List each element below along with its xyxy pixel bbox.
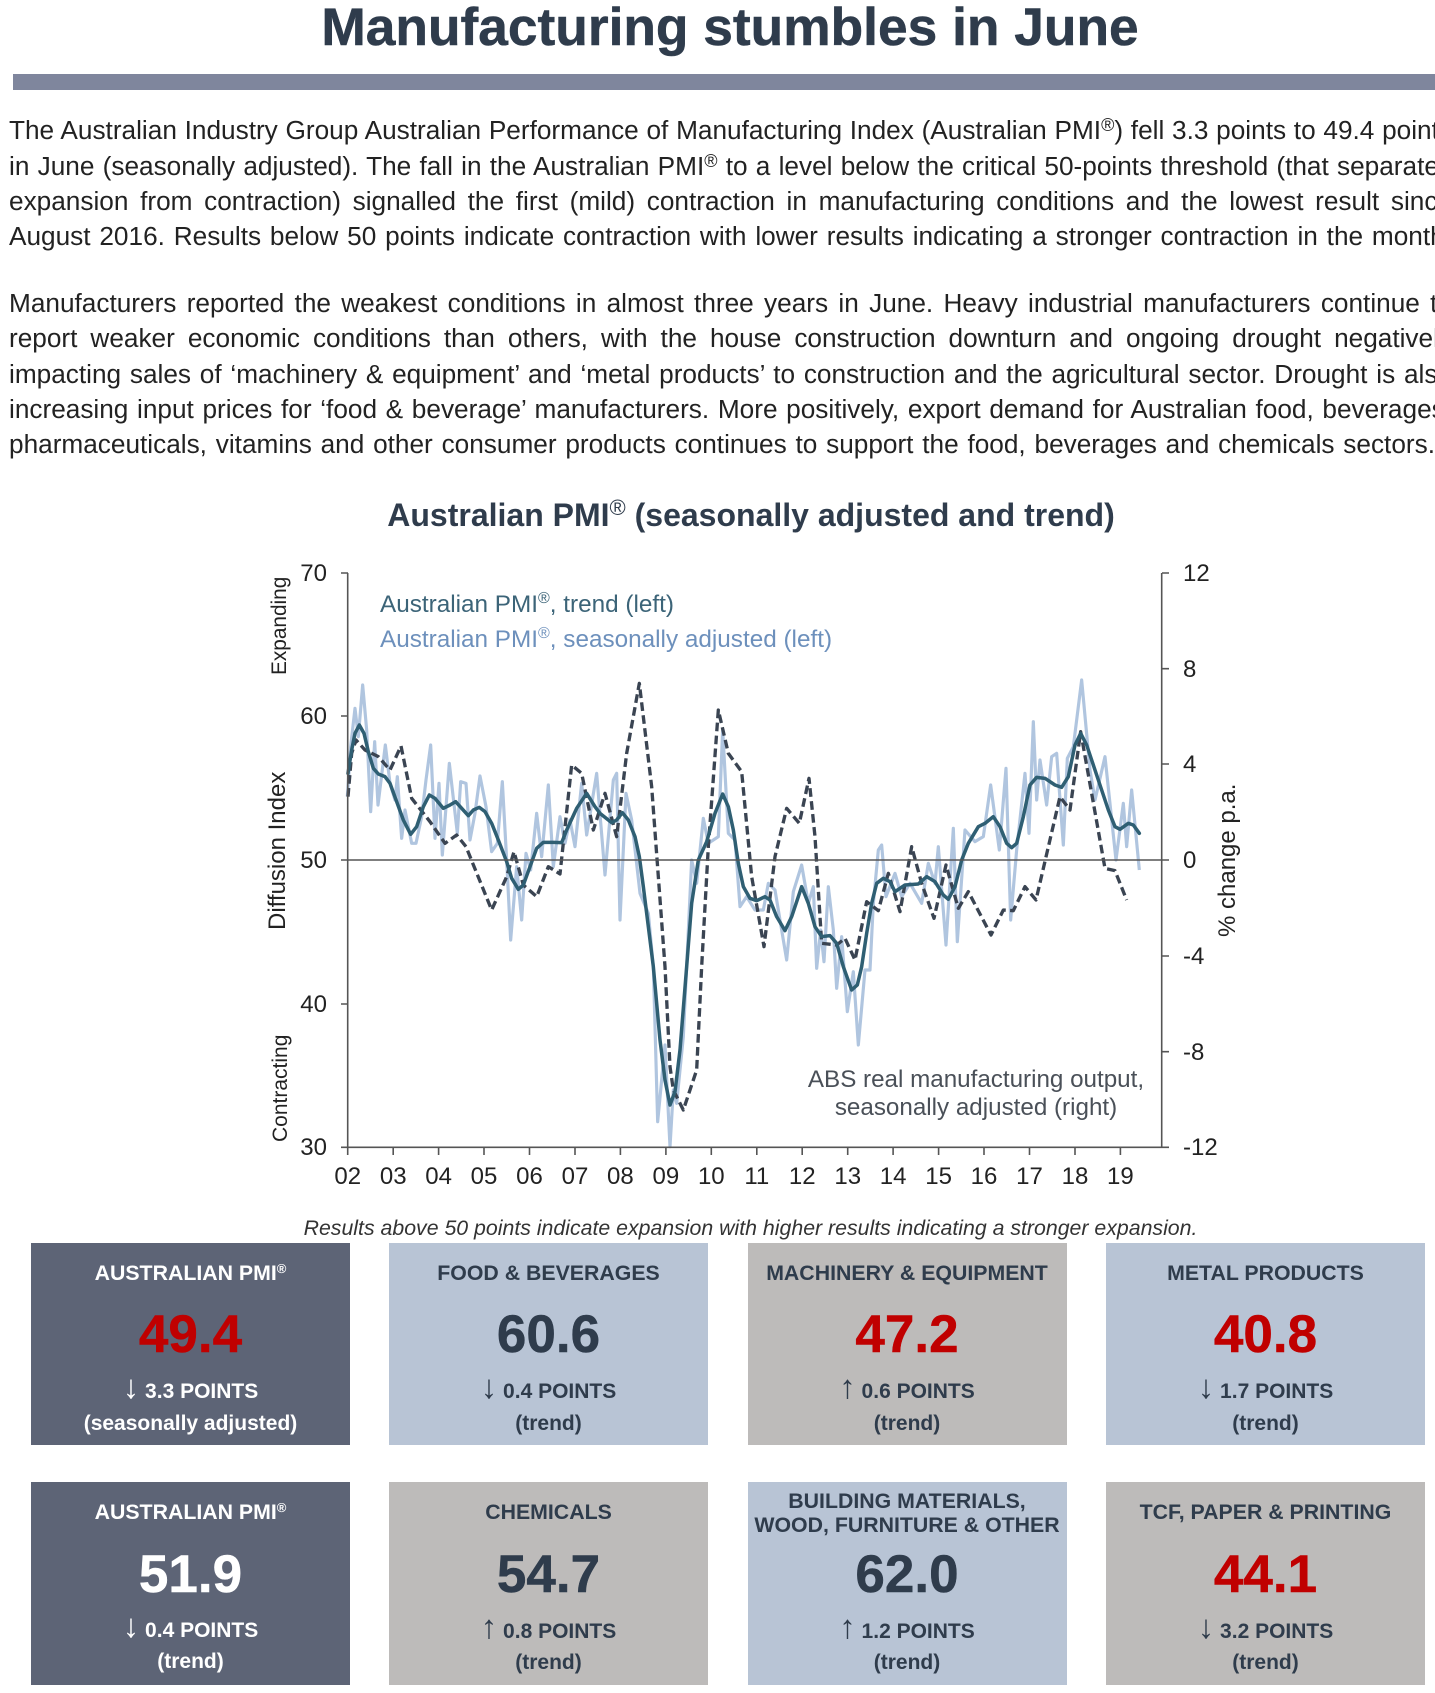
right axis labels: [1183, 560, 1218, 1161]
legend: trend: ®: [538, 590, 550, 607]
card: Machinery and equipment: (trend): [874, 1412, 940, 1435]
title divider bar: [13, 74, 1435, 90]
right axis labels: 12: [1183, 560, 1210, 587]
x axis year labels: 13: [834, 1163, 861, 1190]
card: Metal products: [1106, 1243, 1425, 1445]
card: Metal products: (trend): [1232, 1412, 1299, 1435]
card: Australian PMI seasonally adjusted: (seasonally adjusted): [84, 1412, 297, 1435]
legend: seasonally adjusted: Australian PMI: [380, 626, 538, 653]
card: Machinery and equipment: ↑ 0.6 POINTS: [839, 1368, 975, 1405]
x axis year labels: 18: [1062, 1163, 1088, 1190]
legend: ABS output: ABS real manufacturing output,: [808, 1066, 1144, 1093]
card: Chemicals: [389, 1482, 708, 1685]
x axis year labels: 12: [789, 1163, 816, 1190]
x axis year labels: 05: [471, 1163, 497, 1190]
axis title: Contracting: Contracting: [269, 1035, 292, 1142]
left axis labels: 60: [300, 703, 327, 730]
card: Food and beverages: [389, 1243, 708, 1445]
text block: intro paragraphs: increasing input prices for ‘food & beverage’ manufacturers. More positively, export demand for Australian food, beverages,: [9, 394, 1435, 424]
x axis year labels: 11: [744, 1163, 769, 1190]
card: Chemicals: CHEMICALS: [485, 1500, 612, 1524]
text block: intro paragraphs: August 2016. Results below 50 points indicate contraction with lower results indicating a stronger contraction in the month.: [9, 221, 1435, 251]
left axis labels: 70: [300, 560, 327, 587]
card: Chemicals: ↑ 0.8 POINTS: [481, 1608, 616, 1645]
right axis labels: 8: [1183, 656, 1196, 683]
legend: seasonally adjusted: , seasonally adjusted (left): [550, 626, 832, 653]
chart heading: ®: [610, 495, 626, 520]
card: TCF, paper and printing: 44.1: [1214, 1545, 1317, 1604]
caption: Results above 50 points indicate expansion with higher results indicating a stronger expansion.: [304, 1216, 1197, 1240]
card: TCF, paper and printing: (trend): [1232, 1651, 1299, 1674]
right axis labels: -8: [1183, 1039, 1204, 1066]
series: PMI seasonally adjusted: [347, 680, 1139, 1147]
x axis year labels: [334, 1163, 1134, 1190]
text block: intro paragraphs: The Australian Industry Group Australian Performance of Manufacturing Index (Australian PMI®) fell 3.3 points to 49.4 points: [9, 115, 1435, 145]
x axis year labels: 06: [516, 1163, 543, 1190]
right axis labels: -4: [1183, 943, 1204, 970]
card: Australian PMI seasonally adjusted: 49.4: [139, 1305, 243, 1364]
axis title: Diffusion Index: Diffusion Index: [264, 772, 291, 930]
card: Australian PMI trend: AUSTRALIAN PMI: [95, 1500, 277, 1524]
card: Chemicals: (trend): [515, 1651, 582, 1674]
text block: intro paragraphs: in June (seasonally adjusted). The fall in the Australian PMI® to a level below the critical 50-points threshold (that separates: [9, 151, 1435, 181]
right axis labels: -12: [1183, 1134, 1218, 1161]
x axis year labels: 07: [562, 1163, 588, 1190]
card: Building materials: WOOD, FURNITURE & OTHER: [754, 1513, 1060, 1537]
card: Building materials: BUILDING MATERIALS,: [788, 1489, 1026, 1513]
card: Food and beverages: 60.6: [497, 1305, 600, 1364]
right axis labels: 4: [1183, 751, 1196, 778]
card: Australian PMI seasonally adjusted: ↓ 3.3 POINTS: [123, 1368, 258, 1405]
x axis year labels: 14: [880, 1163, 906, 1190]
x axis year labels: 10: [698, 1163, 725, 1190]
x axis year labels: 16: [971, 1163, 997, 1190]
legend: seasonally adjusted: ®: [538, 625, 550, 642]
text block: intro paragraphs: Manufacturers reported the weakest conditions in almost three years in June. Heavy industrial manufacturers continue to: [9, 288, 1435, 318]
card: Australian PMI trend: [31, 1482, 350, 1685]
legend: ABS output second line: seasonally adjusted (right): [835, 1094, 1117, 1121]
card: Metal products: METAL PRODUCTS: [1167, 1261, 1364, 1285]
x axis year labels: 09: [653, 1163, 679, 1190]
chart heading: (seasonally adjusted and trend): [626, 497, 1115, 533]
x axis year labels: 17: [1016, 1163, 1043, 1190]
card: Building materials: 62.0: [855, 1545, 959, 1604]
card: Food and beverages: ↓ 0.4 POINTS: [481, 1368, 616, 1405]
x axis year labels: 04: [425, 1163, 452, 1190]
chart heading: Australian PMI: [387, 497, 610, 533]
x axis year labels: 02: [334, 1163, 361, 1190]
card: Building materials: [748, 1482, 1067, 1685]
series: PMI trend: [348, 725, 1139, 1105]
text block: intro paragraphs: [9, 115, 1435, 459]
card: Building materials: ↑ 1.2 POINTS: [839, 1608, 975, 1645]
axis title: Expanding: Expanding: [268, 577, 291, 675]
x axis year labels: 19: [1107, 1163, 1134, 1190]
card: Chemicals: 54.7: [497, 1545, 600, 1604]
card: Metal products: 40.8: [1214, 1305, 1317, 1364]
card: Machinery and equipment: [748, 1243, 1067, 1445]
card: Australian PMI trend: ↓ 0.4 POINTS: [123, 1607, 258, 1644]
line chart: Australian PMI and ABS output: [264, 560, 1241, 1190]
card: TCF, paper and printing: TCF, PAPER & PRINTING: [1140, 1500, 1391, 1524]
right axis labels: 0: [1183, 847, 1196, 874]
left axis labels: 30: [300, 1134, 327, 1161]
card: Food and beverages: FOOD & BEVERAGES: [437, 1261, 660, 1285]
card: Building materials: (trend): [874, 1651, 940, 1674]
left axis labels: 50: [300, 847, 327, 874]
text block: intro paragraphs: expansion from contraction) signalled the first (mild) contraction in manufacturing conditions and the lowest result since: [9, 186, 1435, 216]
card: Australian PMI trend: 51.9: [139, 1545, 242, 1604]
card: TCF, paper and printing: [1106, 1482, 1425, 1685]
card: Australian PMI seasonally adjusted: ®: [277, 1261, 287, 1276]
x axis year labels: 03: [380, 1163, 407, 1190]
card: Australian PMI trend: (trend): [157, 1650, 224, 1673]
text block: intro paragraphs: report weaker economic conditions than others, with the house construction downturn and ongoing drought negatively: [9, 323, 1435, 353]
legend: trend: , trend (left): [550, 591, 674, 618]
axis title: % change p.a.: % change p.a.: [1214, 784, 1241, 937]
x axis year labels: 15: [925, 1163, 952, 1190]
left axis labels: 40: [300, 991, 327, 1018]
card: Machinery and equipment: MACHINERY & EQUIPMENT: [766, 1261, 1048, 1285]
series: ABS real manufacturing output: [348, 683, 1127, 1110]
card: Machinery and equipment: 47.2: [855, 1305, 959, 1364]
text block: intro paragraphs: pharmaceuticals, vitamins and other consumer products continues to support the food, beverages and chemicals sectors.: [9, 429, 1435, 459]
left axis labels: [300, 560, 327, 1161]
card: Metal products: ↓ 1.7 POINTS: [1198, 1368, 1333, 1405]
legend: trend: Australian PMI: [380, 591, 538, 618]
text block: intro paragraphs: impacting sales of ‘machinery & equipment’ and ‘metal products’ to construction and the agricultural sector. Drought is also: [9, 359, 1435, 389]
card: TCF, paper and printing: ↓ 3.2 POINTS: [1198, 1608, 1333, 1645]
card: Australian PMI seasonally adjusted: AUSTRALIAN PMI: [95, 1261, 277, 1285]
card: Australian PMI seasonally adjusted: [31, 1243, 350, 1445]
x axis year labels: 08: [607, 1163, 634, 1190]
card: Australian PMI trend: ®: [277, 1500, 287, 1515]
card: Food and beverages: (trend): [515, 1412, 582, 1435]
